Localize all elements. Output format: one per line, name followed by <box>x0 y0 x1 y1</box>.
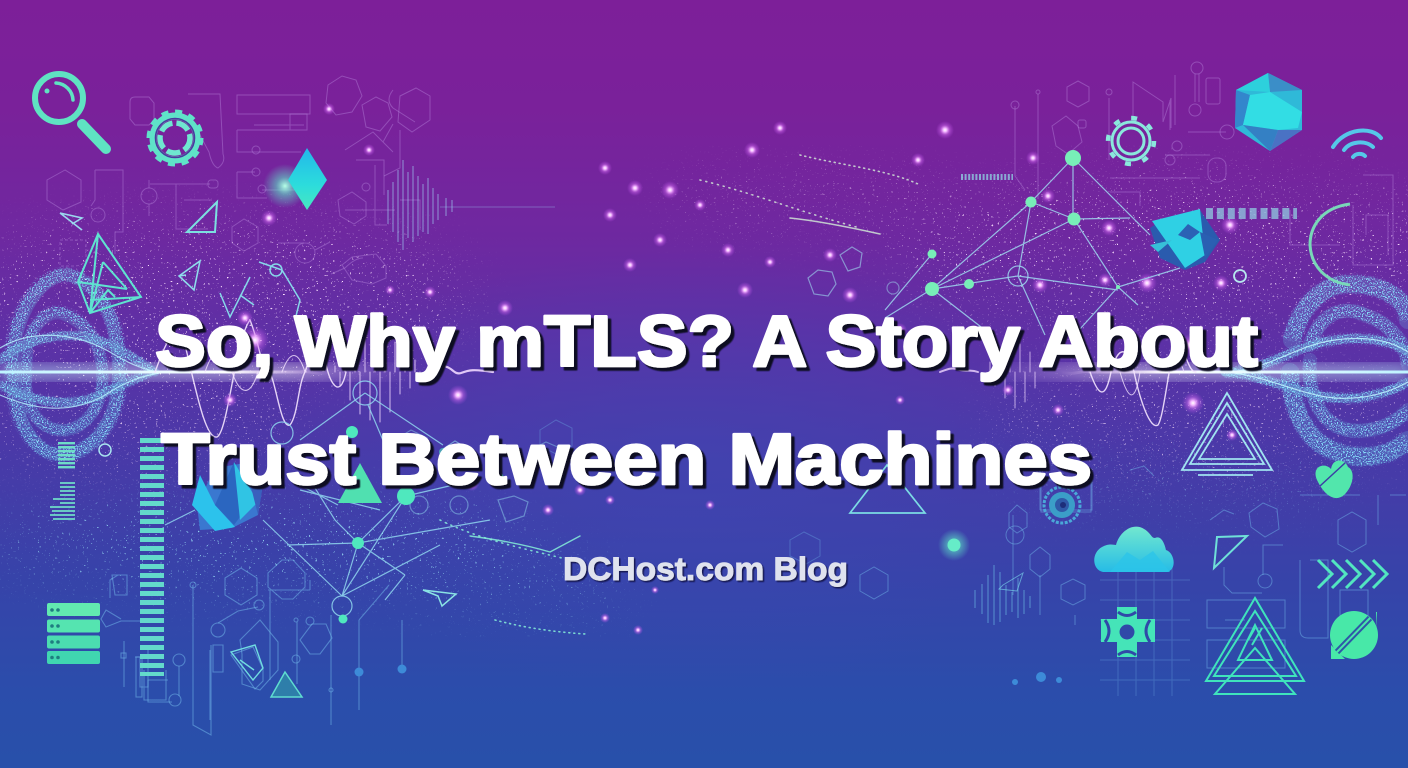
upper waveform left <box>388 160 555 250</box>
glowing green node <box>938 529 970 561</box>
title line 1: So, Why mTLS? A Story About <box>155 302 1258 382</box>
icon: cloud <box>1094 527 1174 572</box>
icon: polygon arrow bottom left <box>231 645 263 680</box>
star dust: cyan lower band <box>0 433 1370 637</box>
icon: small triangle pointer <box>179 261 200 290</box>
left wave mesh <box>0 275 165 455</box>
icon: pen line cluster <box>220 262 300 320</box>
icon: glowing diamond <box>263 148 327 210</box>
icon: planet with slash <box>1330 611 1378 659</box>
icon: chevrons <box>1318 560 1387 588</box>
icon: outline triangle <box>187 202 217 232</box>
upper dust streak <box>700 155 920 234</box>
mesh dust for both wave lobes <box>0 266 1408 468</box>
icon: nested triangles <box>1206 598 1304 694</box>
sparkles <box>223 103 1239 635</box>
icon: target gear <box>1044 487 1080 523</box>
lower waveform right <box>975 565 1030 625</box>
icon: magnifying glass <box>35 74 106 149</box>
icon: circular gear <box>149 112 201 164</box>
network nodes lower left <box>338 426 504 624</box>
lower dust streak <box>440 520 585 634</box>
icon: wifi <box>1333 131 1381 157</box>
icon: dashed block strip <box>1206 208 1297 219</box>
right glowing signal line <box>940 342 1408 426</box>
icon: crystal lower left <box>192 462 262 531</box>
network graph lower left <box>165 381 560 616</box>
icon: solid teal triangle <box>338 463 382 503</box>
icon: concentric triangles <box>1182 393 1272 475</box>
icon: small arrow left top <box>60 213 82 230</box>
icon: barcode tall <box>140 438 164 676</box>
icon: paper arrow <box>423 590 456 606</box>
network nodes top right <box>925 150 1120 296</box>
icon: leaf <box>1316 460 1353 498</box>
icon: gear top right <box>1108 118 1154 164</box>
network graph top right <box>808 158 1180 340</box>
icon: crystal boulder <box>1150 209 1220 270</box>
star dust: purple upper bands <box>0 145 1408 505</box>
left glowing signal line <box>0 320 493 437</box>
icon: barcode small <box>50 442 75 519</box>
icon: celtic knot <box>1101 607 1155 657</box>
faint circuit lines bottom left <box>101 560 406 735</box>
icon: large arc <box>1310 204 1350 285</box>
icon: outline triangle centre <box>850 465 925 513</box>
faint circuit lines top right <box>1011 62 1393 265</box>
icon: small ring <box>1234 270 1246 282</box>
title <box>155 302 1258 500</box>
icon: crystal hexagon <box>1235 73 1302 151</box>
icon: outline triangle right <box>1214 536 1247 568</box>
faint circuit lines top left <box>47 76 430 284</box>
faint circuit lines bottom centre and right <box>540 420 1406 696</box>
right wave mesh <box>1225 284 1408 457</box>
subtitle: DCHost.com Blog <box>563 551 848 587</box>
icon: hollow circle left <box>99 444 111 456</box>
icon: small triangle bottom <box>271 672 302 697</box>
upper dash strip <box>961 174 1013 180</box>
icon: wireframe pyramid <box>78 234 141 313</box>
centre glow <box>270 250 1110 690</box>
icon: server stack <box>47 603 100 664</box>
title line 2: Trust Between Machines <box>161 420 1092 500</box>
